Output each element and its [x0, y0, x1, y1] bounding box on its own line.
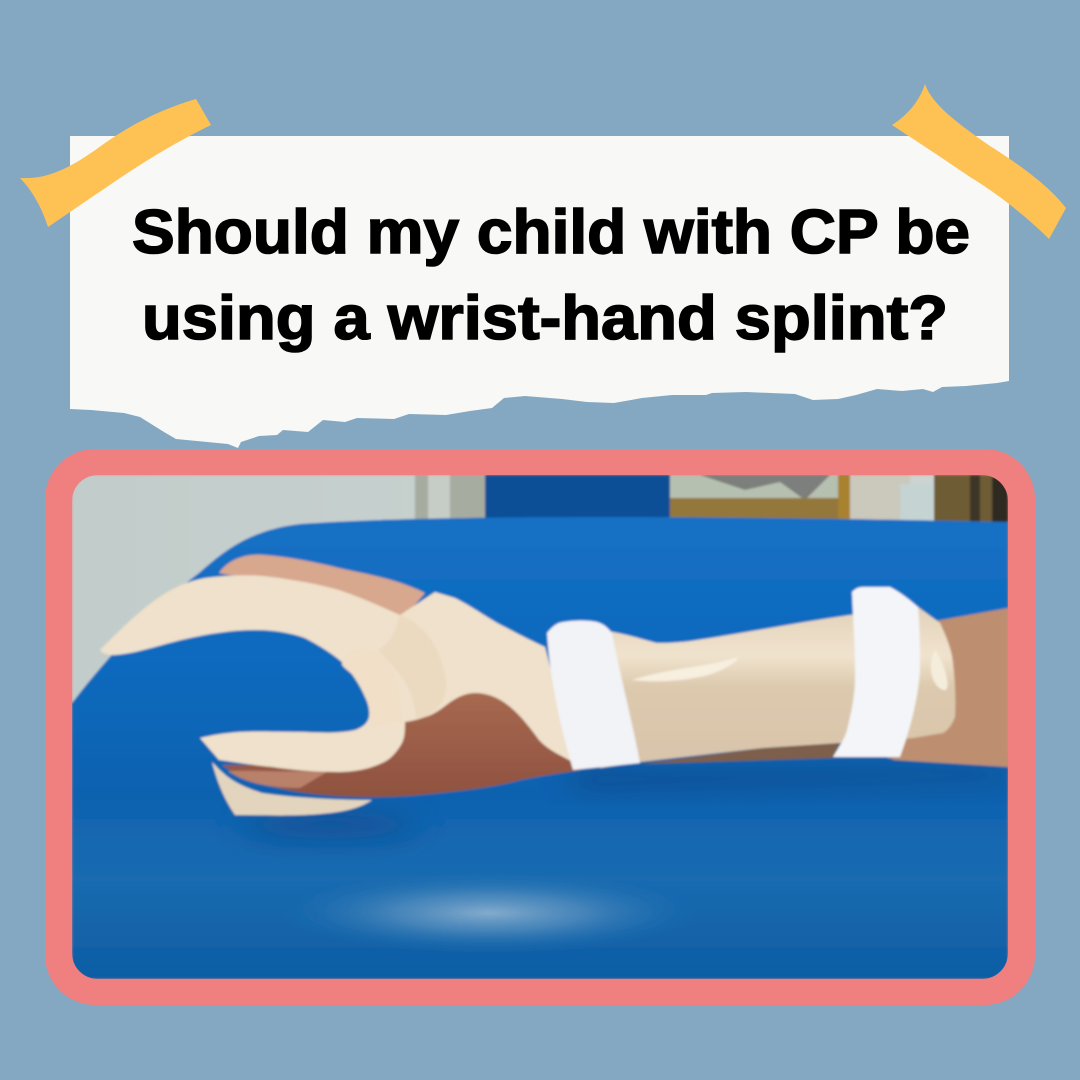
panel: pink photo frame [45, 449, 1035, 1005]
shadow under forearm [560, 768, 1008, 788]
finger highlight [228, 770, 330, 788]
photo wall background [72, 475, 936, 704]
photo background objects [415, 475, 1008, 522]
forearm strap [833, 587, 920, 757]
icon: right tape [892, 84, 1066, 239]
forearm splint gloss [632, 658, 738, 681]
title: Should my child with CP be [132, 198, 970, 267]
photo: splint on forearm [72, 475, 1008, 979]
bench highlight [325, 880, 653, 952]
hand back behind splint [219, 555, 425, 620]
panel: torn paper title card [70, 136, 1009, 448]
title: using a wrist-hand splint? [142, 284, 948, 353]
palm and fingers skin [222, 688, 580, 797]
splint hand section [100, 575, 575, 772]
blue treatment bench [72, 517, 1008, 979]
icon: left tape [20, 99, 211, 227]
wrist strap [547, 620, 640, 770]
shaded skin strip below splint [640, 743, 840, 764]
shadow under hand [240, 811, 420, 839]
title [132, 198, 970, 353]
forearm splint end gloss [931, 650, 948, 690]
lower finger pad under hand [212, 762, 372, 815]
splint shading near wrist [378, 615, 446, 718]
splint forearm section [590, 607, 955, 768]
forearm skin [886, 606, 1008, 770]
thumb piece of splint [340, 662, 352, 676]
